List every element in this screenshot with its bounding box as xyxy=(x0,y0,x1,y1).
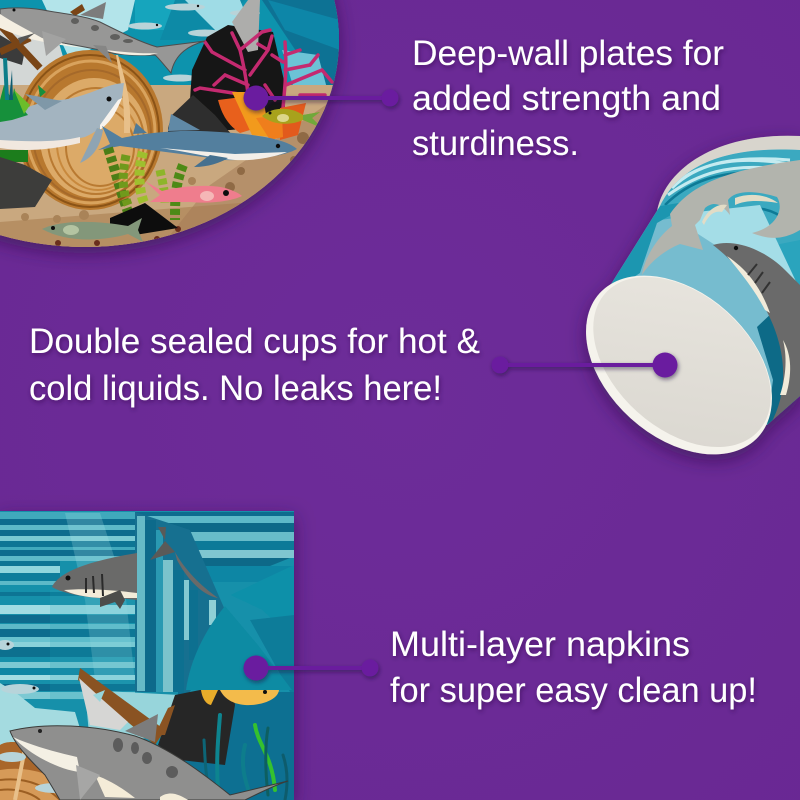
plate green fish xyxy=(42,218,143,242)
napkin dark rock xyxy=(158,690,235,765)
plate orange tube coral xyxy=(218,92,306,140)
cup rim xyxy=(657,136,800,212)
napkin caption: Multi-layer napkins xyxy=(390,625,690,664)
plate small silver fish xyxy=(128,4,265,82)
napkin callout dot xyxy=(244,656,268,680)
plate bottom rocks xyxy=(0,157,178,235)
cup callout dot xyxy=(652,352,678,378)
cup callout end dot xyxy=(492,356,508,374)
plate pink fish xyxy=(145,181,242,203)
cup wave stripes xyxy=(660,150,800,285)
napkin illustration xyxy=(0,511,294,800)
cup light beam xyxy=(695,205,796,281)
napkin shark tail fin xyxy=(150,527,218,598)
cup base xyxy=(551,240,800,490)
plate yellow-green fish xyxy=(262,108,320,126)
plate blue shark xyxy=(98,114,297,167)
cup callout line xyxy=(492,352,678,378)
napkin callout end dot xyxy=(362,660,378,676)
plate caption: Deep-wall plates for xyxy=(412,34,724,73)
cup dark shark xyxy=(713,243,800,425)
napkin caption xyxy=(390,625,757,710)
cup dark lower wedge xyxy=(757,310,800,425)
napkin lower right dark water xyxy=(178,692,294,800)
cup illustration xyxy=(578,133,800,469)
napkin tiger shark xyxy=(10,714,288,800)
napkin light lower water xyxy=(0,683,80,745)
cup caption xyxy=(29,322,480,408)
napkin oar and sail xyxy=(78,668,175,745)
plate rock and coral xyxy=(168,0,332,135)
cup caption: cold liquids. No leaks here! xyxy=(29,369,442,408)
plate green plants xyxy=(0,58,46,162)
napkin hull xyxy=(0,742,60,800)
cup caption: Double sealed cups for hot & xyxy=(29,322,480,361)
napkin caption: for super easy clean up! xyxy=(390,671,757,710)
napkin horizontal stripes xyxy=(0,512,135,700)
napkin small fish xyxy=(0,640,56,793)
plate callout dot xyxy=(244,86,268,110)
plate seaweed xyxy=(108,148,183,220)
napkin folded vertical stripes xyxy=(135,512,225,692)
plate caption xyxy=(412,34,724,163)
plate water xyxy=(0,0,345,100)
plate callout end dot xyxy=(382,90,398,106)
cup pale shark xyxy=(642,160,800,275)
plate caption: sturdiness. xyxy=(412,124,579,163)
cup left teal wedge xyxy=(611,203,679,284)
plate sand floor xyxy=(0,85,345,260)
plate callout line xyxy=(244,86,398,110)
napkin seaweed xyxy=(204,715,287,800)
plate shipwreck hull xyxy=(0,4,163,210)
napkin dark shark xyxy=(52,553,137,609)
napkin yellow fish xyxy=(201,690,279,705)
plate grey shark xyxy=(0,83,124,163)
plate illustration xyxy=(0,0,345,260)
plate caption: added strength and xyxy=(412,79,721,118)
plate tiger shark xyxy=(0,2,205,73)
napkin callout line xyxy=(244,656,378,680)
napkin fold triangle xyxy=(186,606,292,690)
napkin top right stripes xyxy=(135,512,294,700)
